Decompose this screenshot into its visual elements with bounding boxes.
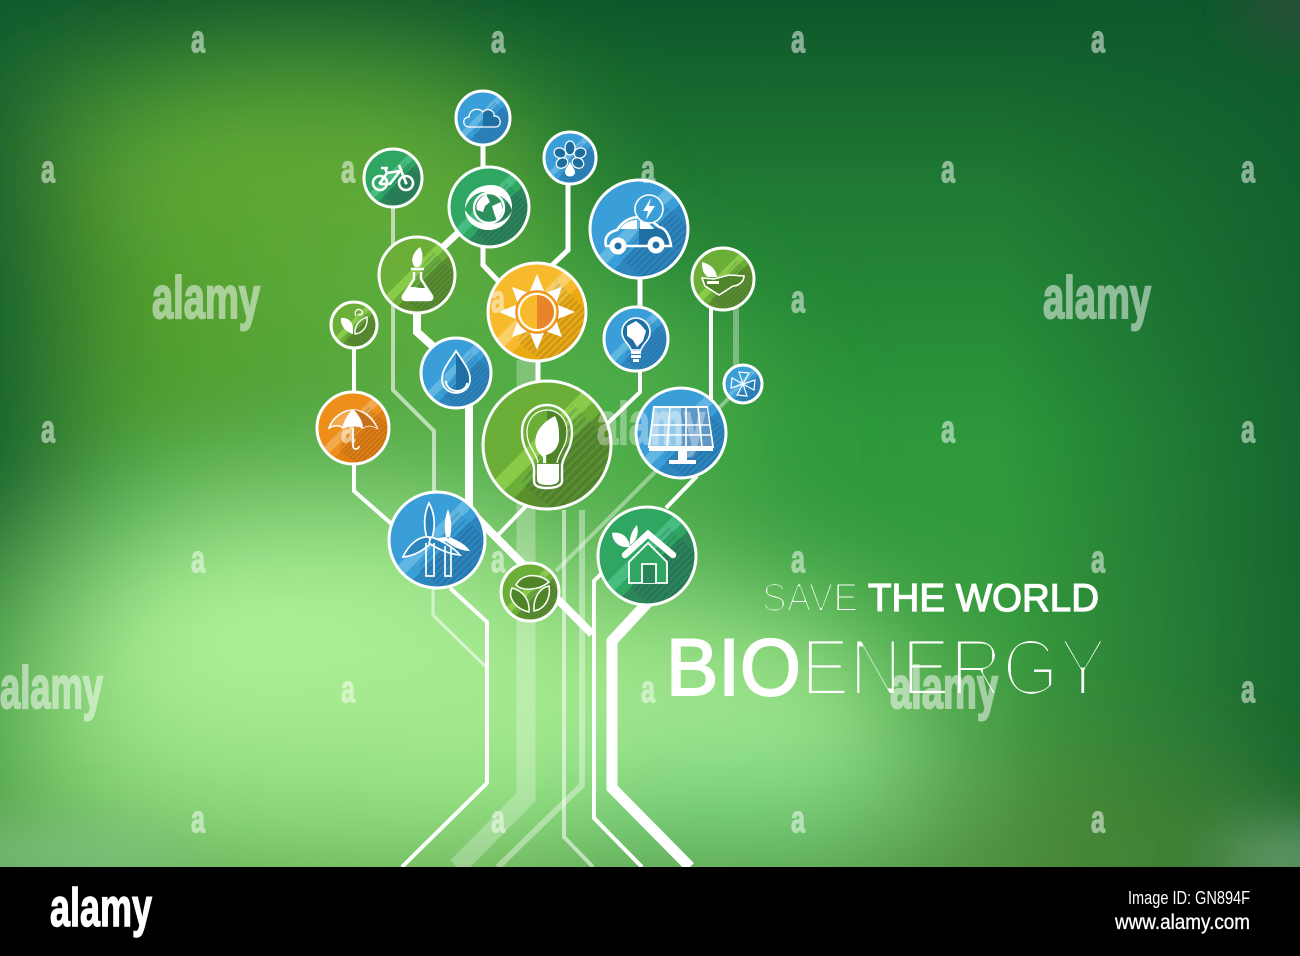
heading: bioenergy: ENERGY [801, 623, 1107, 713]
watermark: small repeated letters: a [791, 279, 806, 321]
watermark: small repeated letters: a [1091, 799, 1106, 841]
icon: water flower [534, 122, 617, 205]
footer bar [0, 867, 1300, 956]
watermark: small repeated letters: a [641, 669, 656, 711]
watermark: small repeated letters: a [941, 149, 956, 191]
heading: save the world [762, 576, 1099, 620]
watermark: alamy logos: alamy [152, 265, 260, 331]
icon: cloud [445, 80, 532, 167]
footer bar: www.alamy.com [1114, 911, 1250, 934]
watermark: small repeated letters: a [1091, 539, 1106, 581]
watermark: small repeated letters: a [1241, 669, 1256, 711]
watermark: small repeated letters: a [1091, 19, 1106, 61]
watermark: small repeated letters: a [41, 149, 56, 191]
icon: water drop [407, 324, 519, 436]
watermark: small repeated letters: a [641, 149, 656, 191]
icon: wind turbines [370, 473, 523, 626]
watermark: alamy logos: alamy [890, 655, 998, 721]
heading: bioenergy [666, 623, 1107, 713]
watermark: alamy logos: alamy [1043, 265, 1151, 331]
heading: save the world: SAVE [762, 576, 858, 620]
watermark: small repeated letters: a [341, 409, 356, 451]
heading: save the world: THE WORLD [868, 577, 1099, 620]
watermark: small repeated letters: a [191, 799, 206, 841]
watermark: small repeated letters: a [1241, 409, 1256, 451]
watermark: small repeated letters: a [41, 409, 56, 451]
footer bar: alamy [50, 878, 152, 938]
watermark: small repeated letters: a [341, 149, 356, 191]
icon: solar panel [618, 370, 762, 514]
watermark: alamy logos [0, 265, 1151, 721]
watermark: small repeated letters: a [341, 669, 356, 711]
watermark: small repeated letters: a [191, 19, 206, 61]
tree branches: pale translucent lines [393, 200, 736, 867]
watermark: alamy logos: alamy [597, 391, 705, 457]
icon: globe [433, 151, 561, 279]
watermark: small repeated letters: a [791, 799, 806, 841]
watermark: small repeated letters: a [791, 539, 806, 581]
icon: flask with leaf flame [364, 222, 485, 343]
watermark: small repeated letters: a [491, 279, 506, 321]
icon: recycling leaves [489, 551, 582, 644]
icon: light bulb with world map [591, 294, 694, 397]
watermark: small repeated letters: a [1241, 149, 1256, 191]
icon: green house [578, 487, 735, 644]
watermark: alamy logos: alamy [0, 655, 103, 721]
footer bar: Image ID: GN894F [1128, 888, 1250, 908]
icon: bicycle [352, 137, 445, 230]
heading: bioenergy: BIO [666, 623, 801, 713]
watermark: small repeated letters: a [491, 19, 506, 61]
watermark: small repeated letters: a [791, 19, 806, 61]
watermark: small repeated letters: a [491, 539, 506, 581]
icon: pinwheel [716, 357, 777, 418]
icon: main light bulb with leaf [457, 355, 662, 560]
icon: hand holding leaf [680, 236, 779, 335]
tree branches and trunk: white lines [354, 145, 711, 867]
icon: leaf sprout [322, 293, 395, 366]
icon: electric car [570, 160, 727, 317]
icon: umbrella [303, 378, 418, 493]
icon: sun [468, 243, 625, 400]
watermark: small repeated letters: a [491, 799, 506, 841]
watermark: small repeated letters: a [941, 409, 956, 451]
watermark: small repeated letters: a [191, 539, 206, 581]
